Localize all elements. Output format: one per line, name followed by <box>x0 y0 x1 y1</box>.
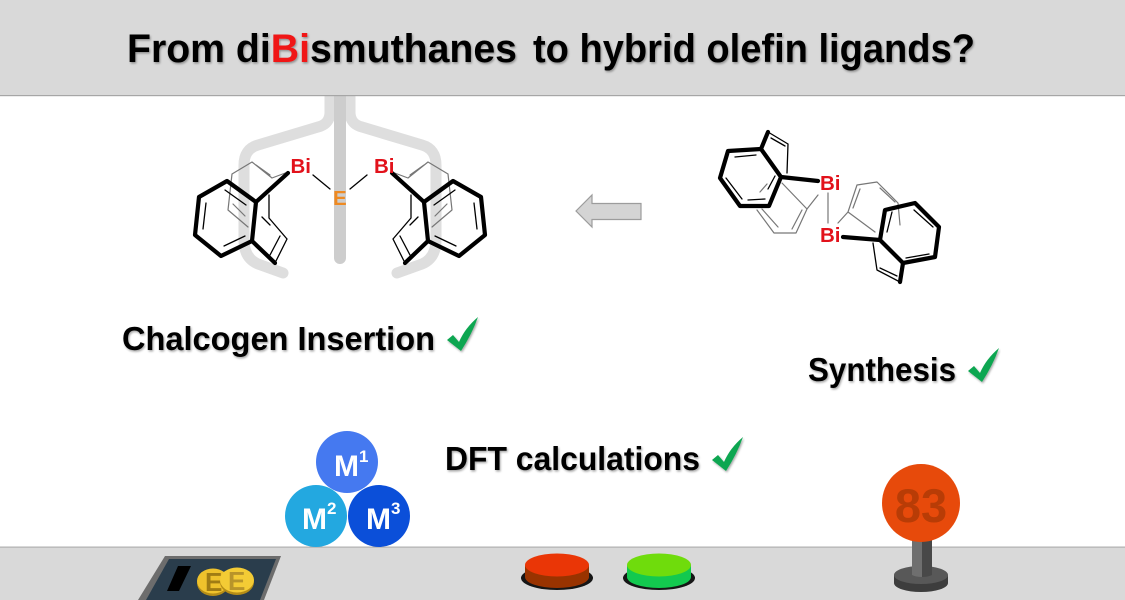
molecule: dibismuthane: Bi <box>820 224 840 247</box>
arrow <box>576 195 641 227</box>
sphere M1 <box>316 431 378 493</box>
coins: E <box>205 567 222 597</box>
bottom bar <box>0 546 1125 600</box>
molecule: chalcogen-bridged dibismuth compound: Bi <box>290 155 311 178</box>
sphere M3: M <box>366 503 391 536</box>
sphere M2 <box>285 485 347 547</box>
coin panel <box>138 556 281 600</box>
sphere M2: 2 <box>327 499 336 518</box>
red button <box>521 554 593 590</box>
sphere M3: 3 <box>391 499 400 518</box>
title: to hybrid olefin ligands? <box>533 27 975 71</box>
green button <box>623 554 695 590</box>
coin slot <box>167 566 191 591</box>
right ligand <box>392 162 485 263</box>
label: DFT calculations: DFT calculations <box>445 440 700 477</box>
label: synthesis: Synthesis <box>808 351 956 388</box>
coins: E <box>228 566 245 596</box>
icon: check mark <box>968 348 999 382</box>
metal spheres <box>285 431 410 547</box>
sphere M3 <box>348 485 410 547</box>
label: chalcogen insertion: Chalcogen Insertion <box>122 320 435 357</box>
molecule: chalcogen-bridged dibismuth compound <box>195 155 485 263</box>
molecule: dibismuthane: Bi <box>820 172 840 195</box>
connector tree behind the ligand <box>244 90 436 273</box>
title: From diBismuthanes <box>127 27 517 71</box>
icon: check mark <box>712 437 743 471</box>
left naphthalene-type ligand <box>195 162 288 263</box>
sphere M1: 1 <box>359 447 368 466</box>
joystick with element 83: 83 <box>895 479 947 532</box>
chalcogen E: E <box>333 187 347 210</box>
sphere M2: M <box>302 503 327 536</box>
icon: check mark <box>447 317 478 351</box>
sphere M1: M <box>334 450 359 483</box>
molecule: dibismuthane <box>720 132 939 282</box>
coins <box>197 566 254 597</box>
title <box>127 27 975 71</box>
joystick with element 83 <box>882 464 960 592</box>
title bar <box>0 0 1125 96</box>
molecule: chalcogen-bridged dibismuth compound: Bi <box>374 155 394 178</box>
